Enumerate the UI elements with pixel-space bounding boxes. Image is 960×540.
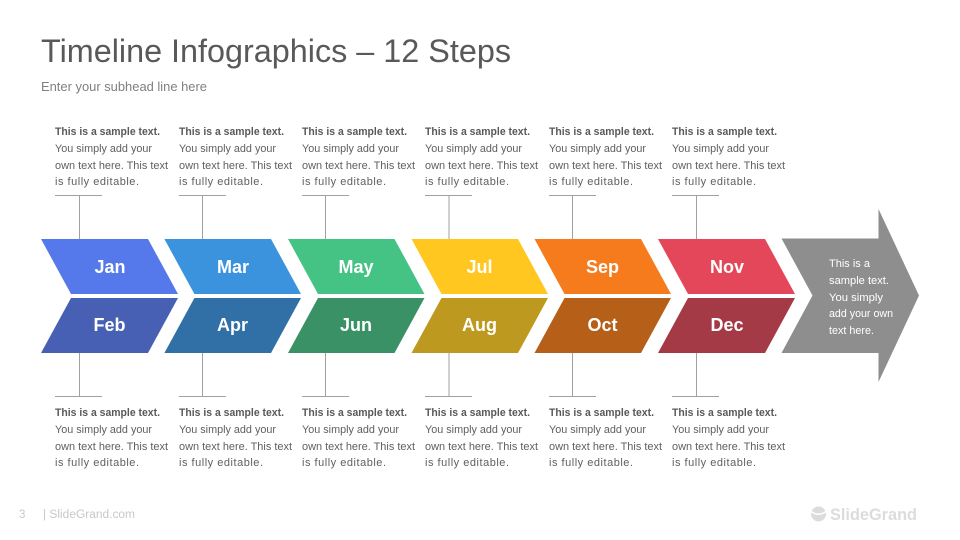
text block: Mar: is fully editable.: [179, 176, 263, 188]
text block: Jun: is fully editable.: [302, 457, 386, 469]
text block: Jul: You simply add your: [425, 143, 522, 155]
text block: Jul: is fully editable.: [425, 176, 509, 188]
connector: Apr: [179, 353, 226, 396]
text block: Mar: You simply add your: [179, 143, 276, 155]
text block: May: You simply add your: [302, 143, 399, 155]
text block: Jan: You simply add your: [55, 143, 152, 155]
text block: Dec: own text here. This text: [672, 441, 785, 453]
text block: Nov: own text here. This text: [672, 160, 785, 172]
chevron: Feb: Feb: [93, 315, 126, 335]
text block: Jul: own text here. This text: [425, 160, 538, 172]
end arrow with text: [782, 209, 919, 382]
logo wordmark: SlideGrand: [830, 505, 917, 524]
text block: Jun: [302, 407, 415, 469]
text block: Feb: This is a sample text.: [55, 407, 160, 419]
text block: Dec: is fully editable.: [672, 457, 756, 469]
end arrow with text: You simply: [829, 292, 884, 304]
subhead: Enter your subhead line here: [41, 80, 207, 94]
text block: Jul: [425, 126, 538, 188]
chevron: Sep: Sep: [586, 257, 619, 277]
text block: Feb: You simply add your: [55, 424, 152, 436]
text block: Aug: You simply add your: [425, 424, 522, 436]
chevron: Oct: [534, 298, 671, 353]
text block: Jul: This is a sample text.: [425, 126, 530, 138]
chevron: Sep: [534, 239, 671, 294]
text block: Sep: is fully editable.: [549, 176, 633, 188]
chevron: Apr: Apr: [217, 315, 248, 335]
text block: Apr: This is a sample text.: [179, 407, 284, 419]
text block: Dec: You simply add your: [672, 424, 769, 436]
text block: Jan: is fully editable.: [55, 176, 139, 188]
chevron: Feb: [41, 298, 178, 353]
text block: Aug: This is a sample text.: [425, 407, 530, 419]
text block: Dec: [672, 407, 785, 469]
chevron: Mar: [164, 239, 301, 294]
chevron: Nov: [658, 239, 795, 294]
text block: Mar: [179, 126, 292, 188]
connector: Jul: [425, 196, 472, 239]
text block: Apr: You simply add your: [179, 424, 276, 436]
connector: Aug: [425, 353, 472, 396]
text block: Oct: [549, 407, 662, 469]
chevron: Jun: Jun: [340, 315, 372, 335]
text block: Jun: You simply add your: [302, 424, 399, 436]
text block: Jun: This is a sample text.: [302, 407, 407, 419]
chevron: Dec: [658, 298, 795, 353]
connector: Feb: [55, 353, 102, 396]
page number: 3: [19, 509, 25, 521]
connector: Jan: [55, 196, 102, 239]
text block: May: This is a sample text.: [302, 126, 407, 138]
chevron: Mar: Mar: [217, 257, 249, 277]
chevron: Aug: [412, 298, 548, 353]
text block: Sep: This is a sample text.: [549, 126, 654, 138]
connector: Nov: [672, 196, 719, 239]
chevron: Oct: Oct: [587, 315, 618, 335]
text block: Jan: own text here. This text: [55, 160, 168, 172]
text block: May: own text here. This text: [302, 160, 415, 172]
chevron: May: [288, 239, 424, 294]
text block: Aug: own text here. This text: [425, 441, 538, 453]
text block: Jun: own text here. This text: [302, 441, 415, 453]
text block: Jan: This is a sample text.: [55, 126, 160, 138]
connector: May: [302, 196, 349, 239]
chevron: Jan: [41, 239, 178, 294]
text block: Oct: This is a sample text.: [549, 407, 654, 419]
text block: Apr: is fully editable.: [179, 457, 263, 469]
text block: Oct: is fully editable.: [549, 457, 633, 469]
text block: Nov: You simply add your: [672, 143, 769, 155]
chevron: Aug: Aug: [462, 315, 497, 335]
footer site name: | SlideGrand.com: [43, 509, 135, 521]
chevron: Jun: [288, 298, 424, 353]
text block: Apr: [179, 407, 292, 469]
connector: Mar: [179, 196, 226, 239]
chevron: Apr: [164, 298, 301, 353]
end arrow with text: sample text.: [829, 275, 889, 287]
end arrow with text: add your own: [829, 308, 893, 320]
text block: Sep: [549, 126, 662, 188]
text block: Nov: is fully editable.: [672, 176, 756, 188]
icon: logo mark: [811, 506, 826, 522]
connector: Jun: [302, 353, 349, 396]
text block: Apr: own text here. This text: [179, 441, 292, 453]
text block: Aug: [425, 407, 538, 469]
text block: Feb: [55, 407, 168, 469]
text block: Nov: This is a sample text.: [672, 126, 777, 138]
connector: Sep: [549, 196, 596, 239]
text block: Aug: is fully editable.: [425, 457, 509, 469]
text block: Dec: This is a sample text.: [672, 407, 777, 419]
text block: Jan: [55, 126, 168, 188]
text block: Mar: This is a sample text.: [179, 126, 284, 138]
chevron: Jan: Jan: [94, 257, 126, 277]
connector: Oct: [549, 353, 596, 396]
text block: Feb: own text here. This text: [55, 441, 168, 453]
end arrow with text: text here.: [829, 325, 874, 337]
text block: May: is fully editable.: [302, 176, 386, 188]
text block: Mar: own text here. This text: [179, 160, 292, 172]
text block: Nov: [672, 126, 785, 188]
chevron: Nov: Nov: [710, 257, 744, 277]
chevron: Dec: Dec: [710, 315, 744, 335]
chevron: Jul: Jul: [466, 257, 493, 277]
text block: Sep: own text here. This text: [549, 160, 662, 172]
chevron: May: May: [338, 257, 374, 277]
title: Timeline Infographics – 12 Steps: [41, 33, 511, 69]
text block: Sep: You simply add your: [549, 143, 646, 155]
text block: May: [302, 126, 415, 188]
text block: Feb: is fully editable.: [55, 457, 139, 469]
connector: Dec: [672, 353, 719, 396]
chevron: Jul: [412, 239, 548, 294]
end arrow with text: This is a: [829, 258, 870, 270]
text block: Oct: own text here. This text: [549, 441, 662, 453]
text block: Oct: You simply add your: [549, 424, 646, 436]
